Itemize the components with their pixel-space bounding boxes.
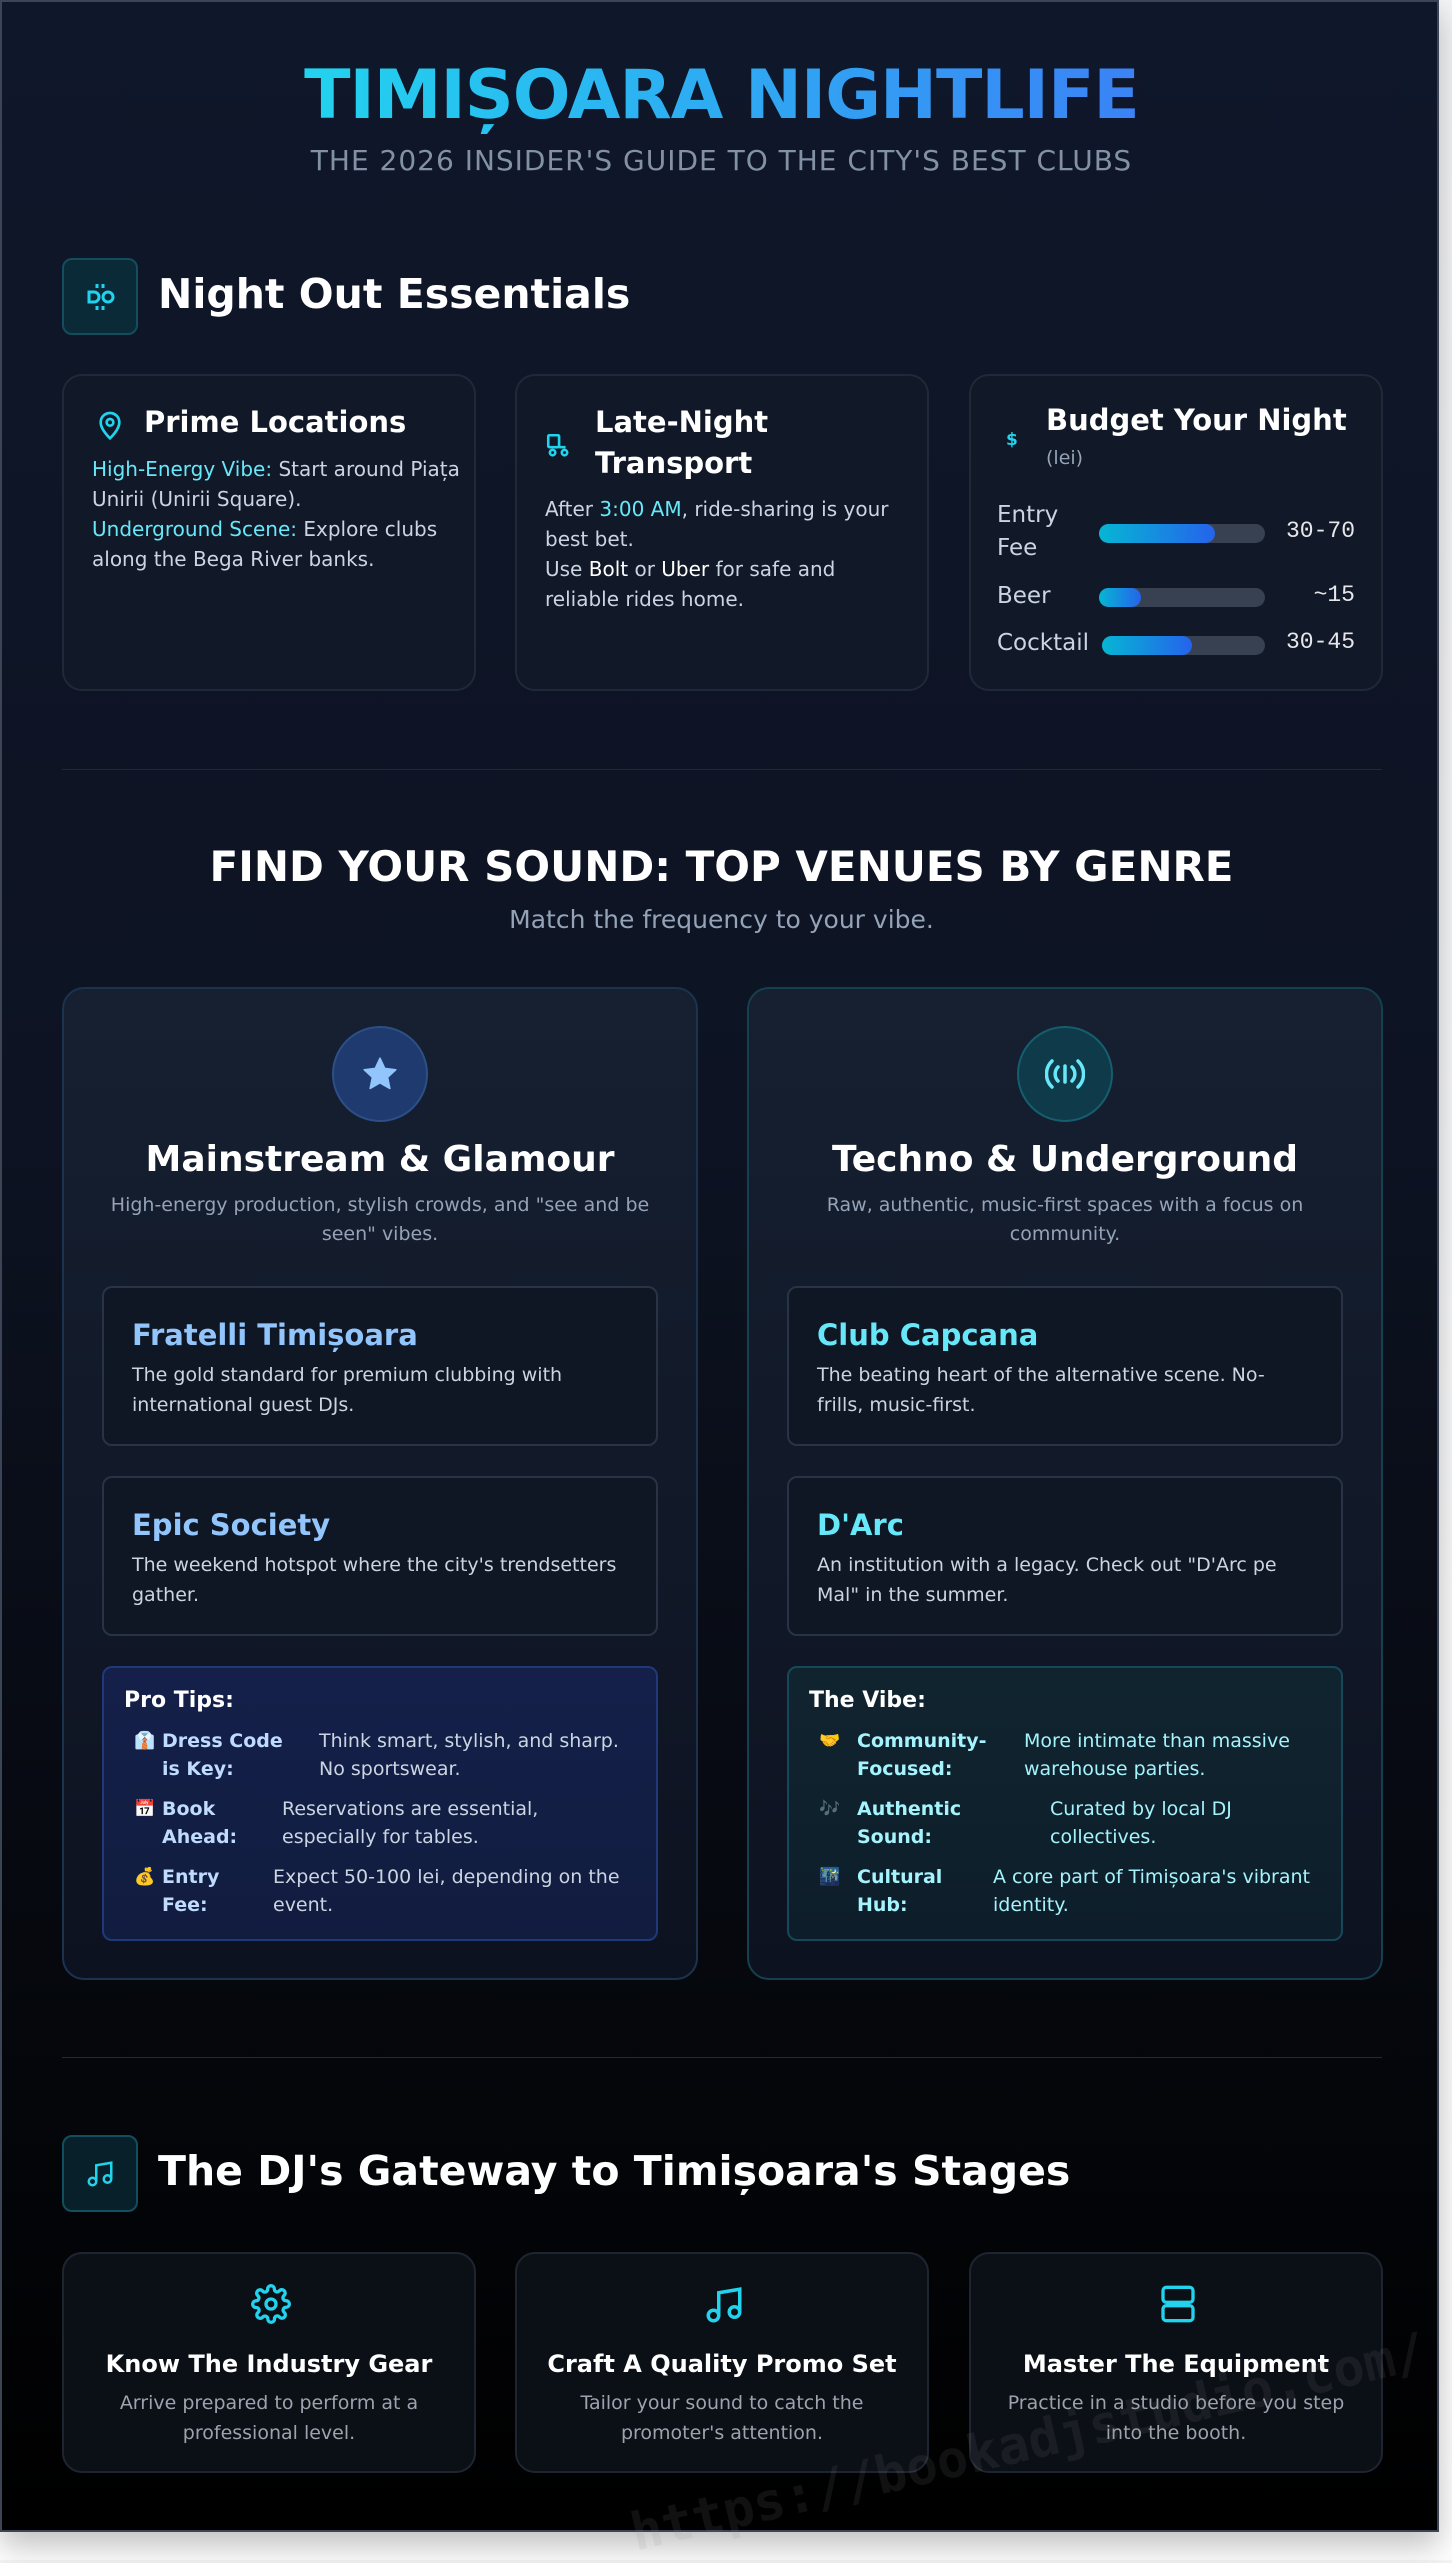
the vibe: Community- bbox=[857, 1730, 987, 1752]
card: master equipment bbox=[969, 2252, 1383, 2473]
card: industry gear bbox=[62, 2252, 476, 2473]
venue: Epic Society: The weekend hotspot where the city's trendsetters gather. bbox=[132, 1554, 616, 1606]
pro tips: event. bbox=[273, 1894, 333, 1916]
section heading: Night Out Essentials: Night Out Essentials bbox=[158, 270, 630, 318]
the vibe: warehouse parties. bbox=[1024, 1758, 1205, 1780]
the vibe: identity. bbox=[993, 1894, 1069, 1916]
card: prime locations: Underground Scene: Explore clubs along the Bega River banks. bbox=[92, 517, 437, 571]
pro tips: Ahead: bbox=[162, 1826, 237, 1848]
the vibe: 🎶 bbox=[819, 1799, 840, 1819]
venue: D'Arc: An institution with a legacy. Check out "D'Arc pe Mal" in the summer. bbox=[817, 1554, 1277, 1606]
section heading: DJ's gateway: The DJ's Gateway to Timișoara's Stages bbox=[158, 2147, 1070, 2195]
the vibe: Sound: bbox=[857, 1826, 932, 1848]
card: prime locations: High-Energy Vibe: Start around Piața Unirii (Unirii Square). bbox=[92, 457, 460, 511]
card: late-night transport: Transport bbox=[595, 446, 752, 480]
the vibe: The Vibe: bbox=[809, 1688, 926, 1713]
panel: techno & underground: Raw, authentic, music-first spaces with a focus on community. bbox=[827, 1194, 1303, 1245]
card: budget your night bbox=[969, 374, 1383, 691]
card: prime locations bbox=[62, 374, 476, 691]
icon: star bbox=[332, 1026, 428, 1122]
section heading: Night Out Essentials bbox=[62, 258, 630, 335]
pro tips: 📅 bbox=[134, 1799, 155, 1819]
pro tips: Book bbox=[162, 1798, 215, 1820]
pro tips: Expect 50-100 lei, depending on the bbox=[273, 1866, 620, 1888]
the vibe: Hub: bbox=[857, 1894, 908, 1916]
card: master equipment: Master The Equipment bbox=[1023, 2350, 1329, 2378]
icon: dollar: $ bbox=[1006, 430, 1018, 450]
venue: Club Capcana: Club Capcana bbox=[817, 1318, 1038, 1352]
subheading: Match the frequency to your vibe. bbox=[509, 905, 934, 934]
venue: Epic Society: Epic Society bbox=[132, 1508, 330, 1542]
venue: Fratelli: Fratelli Timișoara bbox=[132, 1318, 418, 1352]
venue: D'Arc: D'Arc bbox=[817, 1508, 904, 1542]
icon: essentials bbox=[62, 258, 138, 335]
pro tips bbox=[102, 1666, 658, 1941]
the vibe: Cultural bbox=[857, 1866, 942, 1888]
venue: Club Capcana bbox=[787, 1286, 1343, 1446]
bar chart: budget: Cocktail bbox=[997, 630, 1089, 656]
bar chart: budget: Entry bbox=[997, 502, 1058, 528]
icon: server bbox=[1161, 2286, 1195, 2322]
panel: techno & underground bbox=[747, 987, 1383, 1980]
card: late-night transport: After 3:00 AM, ride-sharing is your best bet. bbox=[545, 497, 888, 551]
pro tips: Reservations are essential, bbox=[282, 1798, 538, 1820]
budget title: Budget Your Night bbox=[1046, 403, 1347, 437]
the vibe: A core part of Timișoara's vibrant bbox=[993, 1866, 1310, 1888]
the vibe: Curated by local DJ bbox=[1050, 1798, 1232, 1820]
pro tips: especially for tables. bbox=[282, 1826, 479, 1848]
panel: mainstream & glamour: High-energy production, stylish crowds, and "see and be seen" vibes. bbox=[111, 1194, 649, 1245]
heading: find your sound: FIND YOUR SOUND: TOP VENUES BY GENRE bbox=[210, 842, 1234, 891]
bar chart: budget: 30-45 bbox=[1286, 629, 1355, 655]
card: master equipment: Practice in a studio before you step into the booth. bbox=[1008, 2392, 1344, 2444]
the vibe: Authentic bbox=[857, 1798, 961, 1820]
title: TIMIȘOARA NIGHTLIFE bbox=[304, 56, 1139, 135]
pro tips: No sportswear. bbox=[319, 1758, 461, 1780]
card: late-night transport bbox=[515, 374, 929, 691]
card: industry gear: Arrive prepared to perform at a professional level. bbox=[120, 2392, 418, 2444]
card: late-night transport: Late-Night bbox=[595, 405, 768, 439]
venue: Fratelli bbox=[102, 1286, 658, 1446]
bar chart: budget: Fee bbox=[997, 535, 1037, 561]
pro tips: Entry bbox=[162, 1866, 219, 1888]
pro tips: is Key: bbox=[162, 1758, 234, 1780]
bar chart: budget: 30-70 bbox=[1286, 518, 1355, 544]
bar chart: budget: ~15 bbox=[1314, 582, 1355, 608]
budget title bbox=[1046, 403, 1347, 469]
card: promo set bbox=[515, 2252, 929, 2473]
pro tips: 💰 bbox=[134, 1867, 155, 1887]
the vibe: More intimate than massive bbox=[1024, 1730, 1290, 1752]
the vibe bbox=[787, 1666, 1343, 1941]
venue: D'Arc bbox=[787, 1476, 1343, 1636]
pro tips: 👔 bbox=[134, 1731, 155, 1751]
the vibe: 🌃 bbox=[819, 1867, 840, 1887]
pro tips: Think smart, stylish, and sharp. bbox=[319, 1730, 619, 1752]
icon: gear bbox=[251, 2284, 291, 2324]
budget title: (lei) bbox=[1046, 447, 1083, 469]
card: promo set: Craft A Quality Promo Set bbox=[547, 2350, 897, 2378]
panel: mainstream & glamour bbox=[62, 987, 698, 1980]
subtitle: THE 2026 INSIDER'S GUIDE TO THE CITY'S BEST CLUBS bbox=[311, 144, 1132, 177]
panel: mainstream & glamour: Mainstream & Glamour bbox=[146, 1139, 614, 1180]
venue: Club Capcana: The beating heart of the alternative scene. No-frills, music-first. bbox=[817, 1364, 1265, 1416]
pro tips: Dress Code bbox=[162, 1730, 283, 1752]
icon: map pin bbox=[99, 412, 121, 440]
card: promo set: Tailor your sound to catch the promoter's attention. bbox=[581, 2392, 863, 2444]
venue: Fratelli: The gold standard for premium clubbing with international guest DJs. bbox=[132, 1364, 562, 1416]
bar chart: budget bbox=[997, 502, 1355, 656]
card: industry gear: Know The Industry Gear bbox=[106, 2350, 432, 2378]
watermark: https://bookadjstudio.com/ bbox=[625, 2322, 1432, 2563]
pro tips: Fee: bbox=[162, 1894, 208, 1916]
the vibe: Focused: bbox=[857, 1758, 952, 1780]
pro tips: Pro Tips: bbox=[124, 1688, 234, 1713]
the vibe: collectives. bbox=[1050, 1826, 1156, 1848]
section heading: DJ's gateway bbox=[62, 2135, 1070, 2212]
icon: music note bbox=[62, 2135, 138, 2212]
bar chart: budget: Beer bbox=[997, 583, 1051, 609]
the vibe: 🤝 bbox=[819, 1731, 840, 1751]
icon: signal bbox=[1017, 1026, 1113, 1122]
card: late-night transport: Use Bolt or Uber for safe and reliable rides home. bbox=[545, 557, 835, 611]
card: prime locations: Prime Locations bbox=[144, 405, 406, 439]
icon: note bbox=[706, 2287, 742, 2322]
icon: transport bbox=[546, 434, 568, 457]
panel: techno & underground: Techno & Underground bbox=[832, 1139, 1298, 1180]
venue: Epic Society bbox=[102, 1476, 658, 1636]
